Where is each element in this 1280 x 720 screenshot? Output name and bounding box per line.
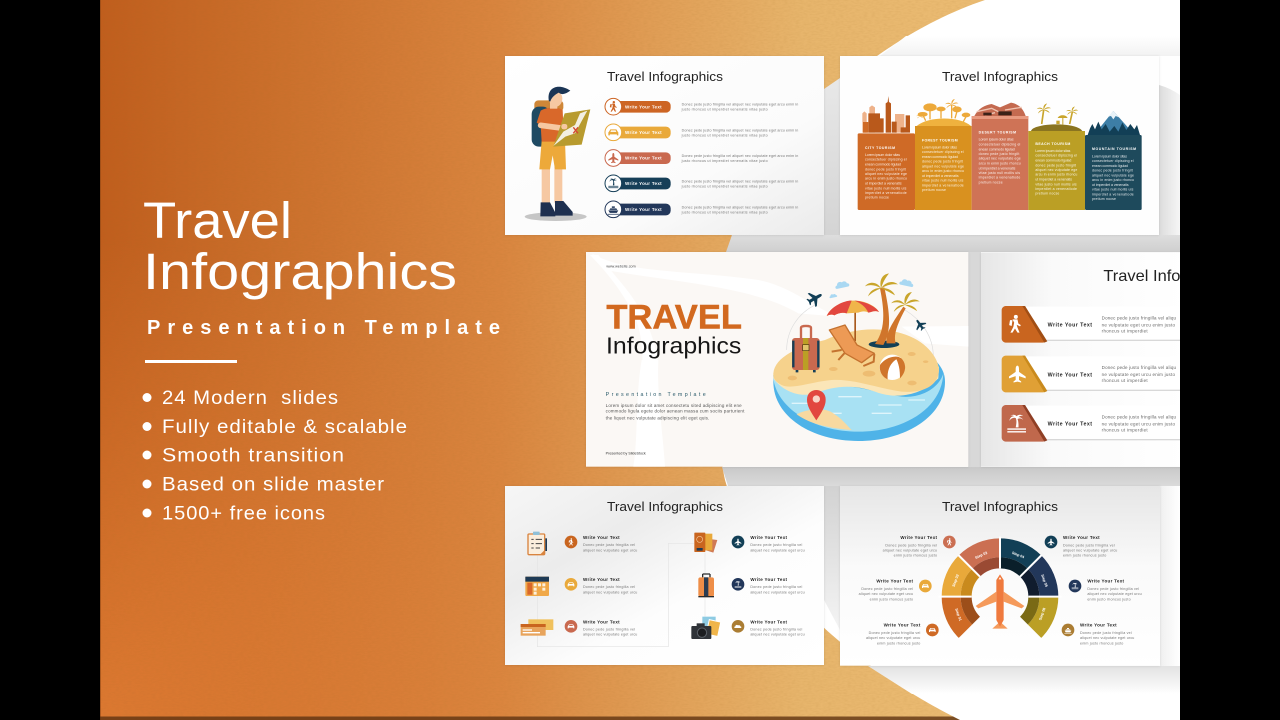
- item 3 text: [681, 154, 798, 163]
- panel: semicircle steps with plane: [840, 486, 1160, 666]
- row 2: plane tag: Write Your Text: [1048, 372, 1092, 378]
- column: mountain tourism: enean commodo ligulad: [1092, 164, 1128, 168]
- column: forest tourism: enean commodo ligulad: [922, 155, 958, 159]
- feature bullet list: [142, 388, 408, 524]
- soft shadows cast by the slides onto the white circle: [722, 36, 1180, 694]
- item 2 text: justo rhoncus ut imperdiet venenatis vitae justo: [681, 133, 768, 137]
- item 3 text: Donec pede justo fringilla vel aliquet nec vulputate eget arcu enim in: [682, 154, 798, 158]
- left column icons and text: aliquet nec vulputate eget urcu: [583, 633, 637, 637]
- item 2 pill: [605, 124, 671, 141]
- item 3 pill: Write Your Text: [625, 156, 662, 161]
- column: beach tourism: donec pede justo fringilt: [1035, 163, 1076, 167]
- column: beach tourism: arcu in enim justo rhoncu: [1035, 173, 1077, 177]
- right callouts: aliquet nec vulputate eget urcu: [1063, 549, 1117, 553]
- right column icons and text: Write Your Text: [750, 619, 787, 624]
- description: the liquet nec vulputate adipiscing elit eget quis.: [606, 415, 709, 420]
- right column icons and text: [732, 535, 805, 637]
- column: forest tourism: vitae justo null mollis uis: [922, 179, 964, 183]
- row 1: hiking tag: [1002, 306, 1180, 343]
- column: desert tourism: enean commodo ligulad: [979, 147, 1015, 151]
- feature bullet list: Based on slide master: [162, 474, 385, 496]
- heading: Travel Infographics: [143, 192, 457, 300]
- column: city tourism: [858, 96, 915, 210]
- column: desert tourism: consectetuer dipiscing el: [979, 142, 1021, 146]
- column: mountain tourism: arcu in enim justo rhoncu: [1092, 178, 1134, 182]
- column: desert tourism: pretium nocse: [979, 180, 1003, 184]
- right callouts: aliquet nec vulputate eget urcu: [1087, 592, 1142, 596]
- right column icons and text: Write Your Text: [750, 577, 787, 582]
- column: beach tourism: [1028, 103, 1085, 210]
- row 3: island tag: [1002, 405, 1180, 442]
- column: mountain tourism: pretium nocse: [1092, 197, 1116, 201]
- item 4 pill: [605, 175, 671, 192]
- item 1 text: [681, 103, 798, 112]
- panel: traveller with five labelled items: Travel Infographics: [607, 69, 723, 84]
- column: desert tourism: ut imperdiet a venenatis: [979, 166, 1016, 170]
- chart: six-step radial ring: [938, 537, 1062, 631]
- column: beach tourism: enean commodo ligulad: [1035, 159, 1071, 163]
- column: beach tourism: aliquet nec vulputate ege: [1035, 168, 1077, 172]
- row 3: island tag: Write Your Text: [1048, 422, 1092, 428]
- column: desert tourism: aliquet nec vulputate ege: [979, 157, 1021, 161]
- column: beach tourism: vitae justo null mollis uis: [1035, 182, 1077, 186]
- left callouts: Write Your Text: [876, 579, 913, 584]
- chart: six-step radial ring: Step 03: [974, 551, 988, 560]
- column: beach tourism: consectetuer dipiscing el: [1035, 154, 1077, 158]
- feature bullet list: Fully editable & scalable: [162, 417, 408, 438]
- column: forest tourism: [915, 99, 972, 210]
- item 5 text: [681, 205, 798, 214]
- title: Infographics: Infographics: [606, 332, 741, 358]
- row 3: island tag: Donec pede justo fringilla vel aliqu: [1102, 414, 1176, 419]
- chart: six-step radial ring: Step 04: [1011, 551, 1026, 560]
- column: forest tourism: pretium nocse: [922, 188, 946, 192]
- divider rule: [145, 360, 237, 363]
- row 1: hiking tag: rhoncus ut imperdiet: [1102, 328, 1148, 333]
- description: commodo ligula egete dolor aenean massa cum sociis parturient: [606, 408, 745, 413]
- column: city tourism: ut imperdiet a venenatis: [865, 182, 902, 186]
- panel: five tourism columns: Travel Infographics: [942, 69, 1058, 84]
- right column icons and text: aliquet nec vulputate eget urcu: [750, 633, 805, 637]
- item 2 text: [681, 128, 798, 137]
- background: large white circle: [717, 0, 1180, 720]
- icon: calendar: [525, 577, 549, 596]
- right callouts: Donec pede justo fringilla vel: [1063, 543, 1115, 547]
- column: city tourism: imperdiet a venenatiode: [865, 191, 907, 195]
- left callouts: aliquet nec vulputate eget urcu: [883, 549, 937, 553]
- column: beach tourism: Lorem ipsum dolor sitas: [1035, 149, 1071, 153]
- panel: six icon steps: [505, 486, 824, 665]
- left column icons and text: Write Your Text: [583, 535, 620, 540]
- column: city tourism: enean commodo ligulad: [865, 163, 901, 167]
- feature bullet list: 1500+ free icons: [162, 504, 326, 524]
- description: Lorem ipsum dolor sit amet consectetu sited adipiscing elit ene: [606, 403, 742, 408]
- column: desert tourism: donec pede justo fringilt: [979, 152, 1019, 156]
- column: mountain tourism: ut imperdiet a venenatis: [1092, 183, 1129, 187]
- left callouts: [859, 535, 956, 645]
- column: mountain tourism: imperdiet a venenatiode: [1092, 192, 1134, 196]
- column: mountain tourism: aliquet nec vulputate ege: [1092, 173, 1134, 177]
- left callouts: Donec pede justo fringilla vel: [861, 587, 913, 591]
- column: city tourism: vitae justo null mollis uis: [865, 186, 907, 190]
- heading: Travel Infographics: Infographics: [143, 243, 457, 300]
- panel: three tag rows slide (cropped): Travel Infographics: [1103, 268, 1243, 285]
- right callouts: enim justo rhoncus justo: [1063, 554, 1106, 558]
- right column icons and text: aliquet nec vulputate eget urcu: [750, 548, 805, 552]
- column: forest tourism: ut imperdiet a venenatis: [922, 174, 959, 178]
- right column icons and text: aliquet nec vulputate eget urcu: [750, 590, 805, 594]
- row 1: hiking tag: Donec pede justo fringilla vel aliqu: [1102, 315, 1176, 320]
- column: mountain tourism: donec pede justo fringilt: [1092, 169, 1133, 173]
- column: city tourism: Lorem ipsum dolor sitas: [865, 153, 900, 157]
- description: [606, 403, 745, 420]
- right column icons and text: Donec pede justo fringilla vel: [750, 627, 803, 631]
- column: forest tourism: aliquet nec vulputate ege: [922, 164, 964, 168]
- feature bullet list: Smooth transition: [162, 446, 345, 466]
- icon: camera with photos: [691, 617, 721, 639]
- item 1 text: Donec pede justo fringilla vel aliquet nec vulputate eget arcu enim in: [682, 103, 798, 107]
- row 2: plane tag: rhoncus ut imperdiet: [1102, 378, 1148, 383]
- right column icons and text: Write Your Text: [750, 535, 787, 540]
- column: city tourism: arcu in enim justo rhoncu: [865, 177, 907, 181]
- feature bullet list: 24 Modern slides: [162, 388, 339, 409]
- column: city tourism: pretium nocse: [865, 196, 889, 200]
- column: beach tourism: BEACH TOURISM: [1035, 142, 1070, 146]
- column: forest tourism: FOREST TOURISM: [922, 138, 958, 142]
- left column icons and text: [565, 535, 637, 637]
- left column icons and text: Donec pede justo fringilla vel: [583, 627, 635, 631]
- right callouts: Write Your Text: [1063, 535, 1100, 540]
- column: beach tourism: imperdiet a venenatiode: [1035, 187, 1077, 191]
- item 4 text: justo rhoncus ut imperdiet venenatis vitae justo: [681, 185, 768, 189]
- left callouts: Donec pede justo fringilla vel: [869, 631, 921, 635]
- chart: six-step radial ring: Step 06: [1038, 607, 1046, 621]
- row 3: island tag: ne vulputate eget urcu enim justo: [1102, 421, 1175, 426]
- item 4 text: [681, 180, 798, 189]
- column: desert tourism: vitae justo null mollis uis: [979, 171, 1020, 175]
- column: desert tourism: DESERT TOURISM: [979, 130, 1016, 134]
- icon: central plane: [976, 574, 1024, 629]
- icon: suitcase: [698, 574, 714, 597]
- column: city tourism: consectetuer dipiscing el: [865, 158, 907, 162]
- left column icons and text: Donec pede justo fringilla vel: [583, 585, 635, 589]
- column: desert tourism: arcu in enim justo rhoncu: [979, 161, 1021, 165]
- item 1 pill: [605, 98, 671, 115]
- icon: passports: [694, 533, 717, 553]
- left callouts: enim justo rhoncus justo: [877, 641, 920, 645]
- column: city tourism: donec pede justo fringilt: [865, 167, 906, 171]
- right column icons and text: Donec pede justo fringilla vel: [750, 585, 803, 589]
- left callouts: enim justo rhoncus justo: [870, 597, 913, 601]
- left callouts: aliquet nec vulputate eget urcu: [866, 636, 920, 640]
- left column icons and text: Donec pede justo fringilla vel: [583, 543, 635, 547]
- chart: six-step radial ring: Step 05: [1040, 574, 1048, 587]
- chart: six-step radial ring: Step 01: [954, 608, 962, 621]
- column: beach tourism: pretium nocse: [1035, 192, 1059, 196]
- icon: tickets: [521, 619, 553, 636]
- website label: www.website.com: [606, 264, 636, 268]
- heading: Travel Infographics: Travel: [143, 192, 292, 249]
- presenter credit: Presented by SlideStock: [606, 451, 646, 455]
- column: forest tourism: arcu in enim justo rhoncu: [922, 169, 964, 173]
- subtitle: Presentation Template: [606, 392, 706, 398]
- item 4 text: Donec pede justo fringilla vel aliquet nec vulputate eget arcu enim in: [682, 180, 798, 184]
- panel: semicircle steps with plane: Travel Infographics: [942, 499, 1058, 514]
- left callouts: enim justo rhoncus justo: [894, 554, 937, 558]
- right callouts: Write Your Text: [1087, 579, 1124, 584]
- right callouts: Donec pede justo fringilla vel: [1080, 631, 1132, 635]
- column: mountain tourism: MOUNTAIN TOURISM: [1092, 147, 1136, 151]
- column: city tourism: CITY TOURISM: [865, 146, 895, 150]
- column: desert tourism: Lorem ipsum dolor sitas: [979, 138, 1014, 142]
- right callouts: [1045, 535, 1142, 645]
- left column icons and text: aliquet nec vulputate eget urcu: [583, 590, 637, 594]
- left callouts: Write Your Text: [900, 535, 937, 540]
- right callouts: Write Your Text: [1080, 623, 1117, 628]
- column: mountain tourism: vitae justo null mollis uis: [1092, 188, 1134, 192]
- left column icons and text: Write Your Text: [583, 619, 620, 624]
- right callouts: Donec pede justo fringilla vel: [1087, 587, 1139, 591]
- right column icons and text: Donec pede justo fringilla vel: [750, 543, 803, 547]
- panel: six icon steps: Travel Infographics: [607, 499, 723, 514]
- item 2 text: Donec pede justo fringilla vel aliquet nec vulputate eget arcu enim in: [682, 128, 798, 132]
- chart: six-step radial ring: Step 02: [952, 574, 960, 587]
- item 1 pill: Write Your Text: [625, 104, 662, 109]
- left column icons and text: aliquet nec vulputate eget urcu: [583, 548, 637, 552]
- row 1: hiking tag: ne vulputate eget urcu enim justo: [1102, 322, 1175, 327]
- right callouts: aliquet nec vulputate eget urcu: [1080, 636, 1134, 640]
- item 5 pill: Write Your Text: [625, 207, 662, 212]
- right callouts: enim justo rhoncus justo: [1080, 641, 1123, 645]
- item 2 pill: Write Your Text: [625, 130, 662, 135]
- row 2: plane tag: [1002, 356, 1180, 392]
- row 2: plane tag: ne vulputate eget urcu enim justo: [1102, 372, 1175, 377]
- column: desert tourism: [972, 103, 1028, 210]
- item 4 pill: Write Your Text: [625, 181, 662, 186]
- illustration: backpacker reading a map: [525, 87, 590, 221]
- row 2: plane tag: Donec pede justo fringilla vel aliqu: [1102, 365, 1176, 370]
- item 3 text: justo rhoncus ut imperdiet venenatis vitae justo: [681, 159, 768, 163]
- column: forest tourism: consectetuer dipiscing el: [922, 150, 964, 154]
- column: mountain tourism: consectetuer dipiscing el: [1092, 159, 1134, 163]
- column: city tourism: aliquet nec vulputate ege: [865, 172, 907, 176]
- column: forest tourism: Lorem ipsum dolor sitas: [922, 145, 957, 149]
- column: forest tourism: imperdiet a venenatiode: [922, 183, 964, 187]
- column: beach tourism: ut imperdiet a venenatis: [1035, 178, 1072, 182]
- icon: clipboard: [528, 532, 547, 555]
- panel: main title slide: [586, 252, 968, 467]
- column: mountain tourism: [1085, 111, 1142, 210]
- illustration: beach island: [773, 273, 945, 441]
- item 3 pill: [605, 150, 671, 166]
- column: desert tourism: imperdiet a venenatiode: [979, 176, 1020, 180]
- item 5 text: justo rhoncus ut imperdiet venenatis vitae justo: [681, 210, 768, 214]
- row 1: hiking tag: Write Your Text: [1048, 323, 1092, 329]
- column: forest tourism: donec pede justo fringilt: [922, 160, 963, 164]
- row 3: island tag: rhoncus ut imperdiet: [1102, 427, 1148, 432]
- item 1 text: justo rhoncus ut imperdiet venenatis vitae justo: [681, 108, 768, 112]
- item 5 text: Donec pede justo fringilla vel aliquet nec vulputate eget arcu enim in: [682, 205, 798, 209]
- left column icons and text: Write Your Text: [583, 577, 620, 582]
- panel: three tag rows slide (cropped): [981, 253, 1243, 467]
- column: mountain tourism: Lorem ipsum dolor sitas: [1092, 154, 1127, 158]
- panel: five tourism columns: [840, 56, 1159, 235]
- panel: traveller with five labelled items: [505, 56, 824, 235]
- subheading: Presentation Template: Presentation Template: [147, 317, 500, 339]
- left callouts: Donec pede justo fringilla vel: [885, 543, 937, 547]
- item 5 pill: [605, 201, 671, 218]
- left callouts: Write Your Text: [884, 623, 921, 628]
- right callouts: enim justo rhoncus justo: [1087, 597, 1131, 601]
- title: TRAVEL: TRAVEL: [606, 298, 742, 336]
- left callouts: aliquet nec vulputate eget urcu: [859, 592, 913, 596]
